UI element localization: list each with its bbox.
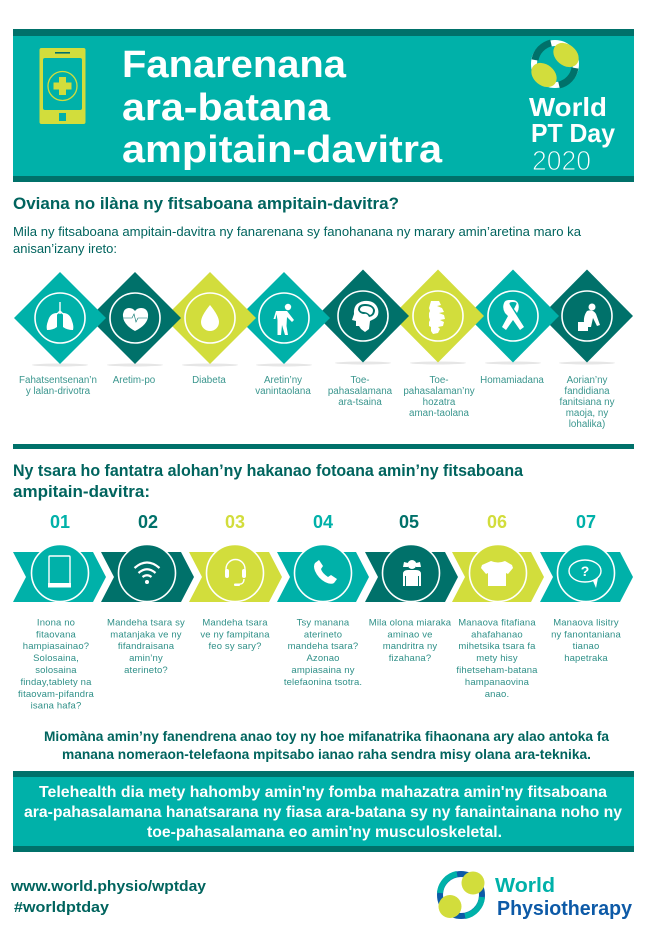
labels: conditions: fanitsiana ny [559, 397, 615, 408]
step descriptions: ny fanontaniana [551, 630, 621, 640]
step descriptions: Azonao [306, 653, 340, 664]
footer links: #worldptday [14, 899, 110, 916]
step descriptions: ampiasaina ny [291, 665, 355, 676]
step descriptions: Manaova fitafiana [458, 618, 536, 628]
logo: World Physiotherapy: Physiotherapy [497, 898, 633, 920]
step descriptions: hapetraka [564, 653, 608, 664]
step descriptions: mandritra ny [383, 641, 437, 652]
step descriptions: Mandeha tsara [202, 618, 268, 628]
intro paragraph: Mila ny fitsaboana ampitain-davitra ny fanarenana sy fanohanana ny marary amin’aretina maro ka [13, 224, 582, 239]
step descriptions: ve ny fampitana [200, 630, 270, 640]
labels: conditions: Fahatsentsenan’n [19, 375, 97, 386]
step descriptions: ahafahanao [471, 630, 523, 640]
logo: World Physiotherapy: World [495, 875, 555, 897]
diamond 7: ribbon [467, 270, 559, 362]
labels: conditions [19, 375, 615, 430]
step descriptions: fizahana? [389, 653, 431, 664]
heading: what is telehealth for: Oviana no ilàna ny fitsaboana ampitain-davitra? [13, 195, 399, 213]
heading: things to know: Ny tsara ho fantatra alohan’ny hakanao fotoana amin’ny fitsaboana [13, 462, 524, 480]
step numbers: 06 [487, 512, 507, 532]
logo: World PT Day 2020 [527, 38, 616, 176]
labels: conditions: y lalan-drivotra [26, 386, 91, 397]
step numbers: 01 [50, 512, 70, 532]
step descriptions: isana hafa? [31, 700, 81, 712]
step numbers: 02 [138, 512, 158, 532]
labels: conditions: maoja, ny [566, 408, 608, 419]
diamond 3: drop [164, 272, 256, 364]
step numbers: 03 [225, 512, 245, 532]
step 1: tablet [13, 544, 106, 602]
diamond row: conditions [14, 270, 633, 366]
step numbers: 05 [399, 512, 419, 532]
title: ara-batana [122, 87, 331, 129]
conclusion banner [13, 771, 634, 852]
step descriptions [18, 618, 621, 712]
step descriptions: hampanaovina [465, 677, 530, 688]
step descriptions: Solosaina, [33, 653, 79, 664]
logo: World PT Day 2020: PT Day [531, 118, 616, 148]
step descriptions: hampiasainao? [23, 641, 89, 652]
step descriptions: mihetsika tsara fa [458, 641, 536, 652]
conclusion banner: ara-pahasalamana hanatsarana ny fiasa ara-batana sy ny fanaintainana noho ny [24, 804, 622, 821]
step 4: telephone [277, 544, 369, 602]
step descriptions: fihetseham-batana [456, 665, 538, 676]
step 2: wifi [101, 544, 194, 602]
labels: conditions: Toe- [429, 375, 449, 386]
step descriptions: mety hisy [476, 653, 518, 664]
logo: World Physiotherapy [438, 872, 633, 920]
step descriptions: Mila olona miaraka [369, 618, 452, 628]
labels: conditions: hozatra [423, 397, 456, 408]
step descriptions: fitaovam-pifandra [18, 689, 95, 700]
labels: conditions: pahasalamana [328, 386, 393, 397]
labels: conditions: fandidiana [564, 386, 610, 397]
header banner [13, 29, 634, 182]
reminder statement: manana nomeraon-telefaona mpitsabo ianao raha sendra misy olana ara-teknika. [62, 746, 591, 762]
labels: conditions: vanintaolana [255, 386, 311, 397]
step 3: headset [189, 544, 282, 602]
step descriptions: feo sy sary? [208, 641, 262, 652]
step descriptions: Tsy manana [297, 618, 350, 628]
step numbers [50, 512, 596, 532]
conclusion banner: Telehealth dia mety hahomby amin'ny fomba mahazatra amin'ny fitsaboana [39, 784, 607, 801]
step 5: person [365, 544, 458, 602]
title: ampitain-davitra [122, 129, 443, 171]
labels: conditions: Diabeta [192, 375, 226, 386]
step descriptions: tianao [573, 641, 599, 652]
step descriptions: fitaovana [36, 630, 77, 640]
labels: conditions: Aretim-po [113, 375, 156, 386]
step 6: t-shirt [452, 544, 544, 602]
logo: World PT Day 2020: World [529, 92, 607, 122]
diamond 6: spine [392, 270, 484, 362]
labels: conditions: Toe- [350, 375, 370, 386]
step descriptions: fifandraisana [118, 641, 175, 652]
labels: conditions: Aorian’ny [567, 375, 608, 386]
step descriptions: telefaonina tsotra. [284, 677, 362, 688]
labels: conditions: ara-tsaina [338, 397, 382, 408]
step descriptions: Inona no [37, 618, 75, 628]
chevron row: steps [13, 544, 633, 602]
diamond 1: lungs [14, 272, 106, 364]
step descriptions: aterineto [304, 630, 342, 640]
reminder statement: Miomàna amin’ny fanendrena anao toy ny hoe mifanatrika fihaonana ary alao antoka fa [44, 728, 609, 744]
labels: conditions: aman-taolana [409, 408, 470, 419]
step descriptions: aminao ve [387, 630, 433, 640]
step descriptions: mandeha tsara? [288, 641, 358, 652]
diamond 4: person walking [238, 272, 330, 364]
step descriptions: solosaina [35, 665, 77, 676]
step numbers: 04 [313, 512, 333, 532]
step numbers: 07 [576, 512, 596, 532]
icon: smartphone with medical cross [40, 48, 86, 124]
footer links: www.world.physio/wptday [10, 878, 207, 895]
step descriptions: aterineto? [124, 665, 168, 676]
step descriptions: amin’ny [129, 653, 163, 664]
title: Fanarenana [122, 44, 347, 86]
conclusion banner: toe-pahasalamana eo amin'ny musculoskeletal. [147, 824, 502, 841]
step descriptions: Manaova lisitry [553, 618, 619, 628]
labels: conditions: lohalika) [569, 419, 605, 430]
step descriptions: anao. [485, 689, 509, 700]
heading: things to know: ampitain-davitra: [13, 483, 150, 501]
labels: conditions: Aretin’ny [264, 375, 302, 386]
diamond 5: head and brain [317, 270, 409, 362]
step 7: question speech bubble: ? [581, 563, 589, 579]
logo: World PT Day 2020: 2020 [532, 145, 591, 176]
step descriptions: matanjaka ve ny [110, 630, 182, 640]
step 7: question speech bubble [540, 544, 633, 602]
step descriptions: finday,tablety na [20, 677, 92, 688]
labels: conditions: Homamiadana [480, 375, 544, 386]
intro paragraph: anisan’izany ireto: [13, 241, 117, 256]
diamond 8: sitting pain [541, 270, 633, 362]
step descriptions: Mandeha tsara sy [107, 618, 185, 628]
labels: conditions: pahasalaman’ny [403, 386, 475, 397]
diamond 2: heart with pulse [89, 272, 181, 364]
